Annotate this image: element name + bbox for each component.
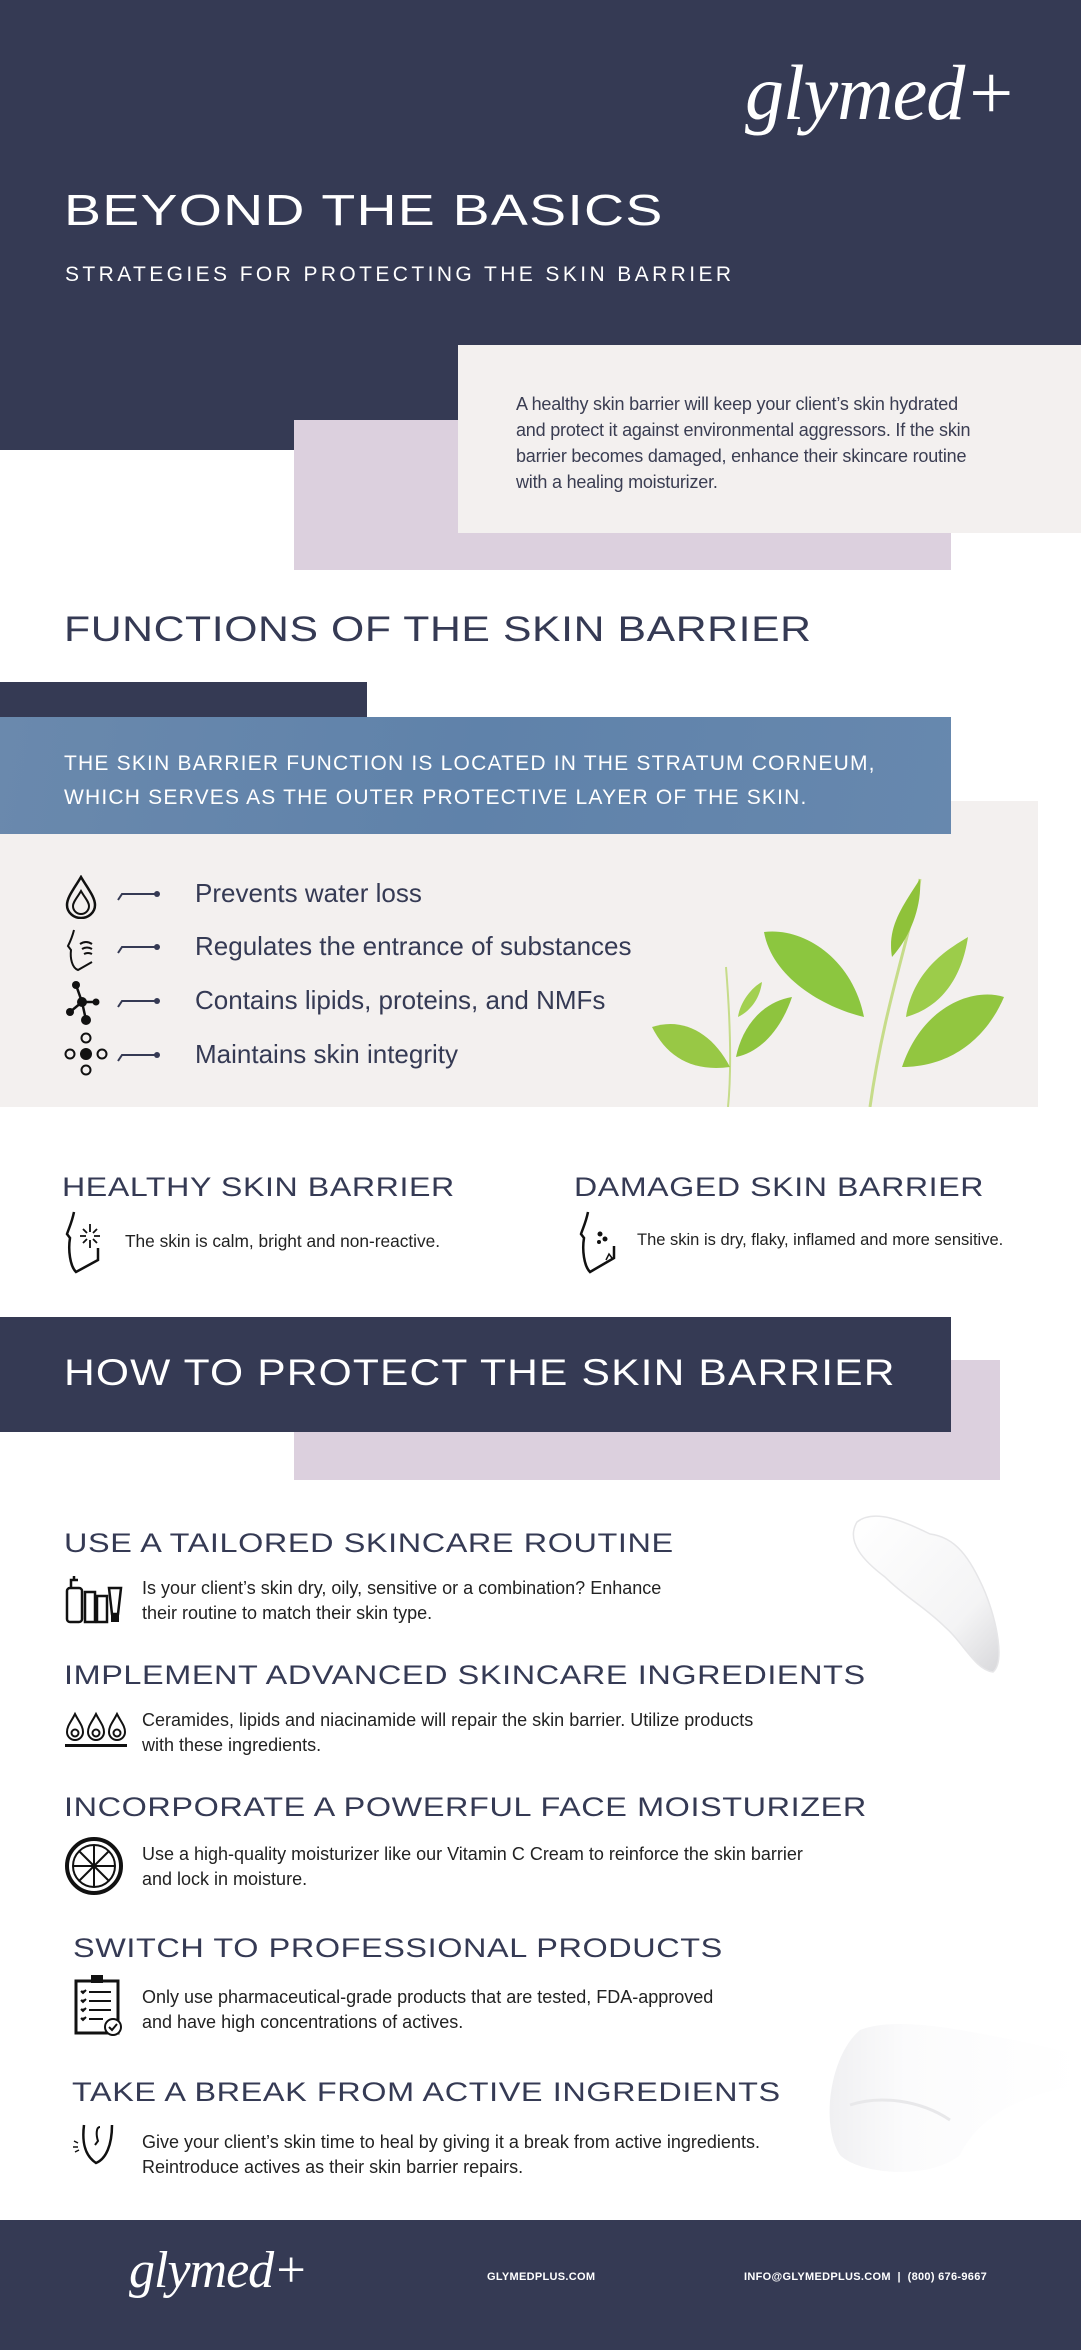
damaged text with icon: The skin is dry, flaky, inflamed and more sensitive. xyxy=(637,1231,1003,1249)
text: and have high concentrations of actives. xyxy=(142,2012,463,2032)
heading: functions: FUNCTIONS OF THE SKIN BARRIER xyxy=(64,610,812,649)
intro text box: barrier becomes damaged, enhance their skincare routine xyxy=(516,446,966,466)
footer website: GLYMEDPLUS.COM xyxy=(487,2271,595,2283)
intro text box: A healthy skin barrier will keep your client’s skin hydrated xyxy=(516,394,958,414)
list item: integrity: Maintains skin integrity xyxy=(195,1039,458,1069)
intro text box: with a healing moisturizer. xyxy=(516,472,718,492)
icon: face xyxy=(66,930,92,972)
text: Only use pharmaceutical-grade products that are tested, FDA-approved xyxy=(142,1987,713,2007)
section: professional products xyxy=(73,1933,723,2036)
damaged text with icon xyxy=(580,1212,1003,1274)
text: with these ingredients. xyxy=(142,1735,321,1755)
section: tailored routine xyxy=(64,1528,674,1624)
section: tailored routine: USE A TAILORED SKINCARE ROUTINE xyxy=(64,1528,674,1558)
navy accent bar xyxy=(0,682,367,718)
illustration: cream swatch bottom xyxy=(830,2026,951,2170)
text: and lock in moisture. xyxy=(142,1869,307,1889)
healthy text with icon: The skin is calm, bright and non-reactive. xyxy=(125,1231,440,1251)
illustration: leaves xyxy=(652,878,1004,1107)
footer logo: glymed+ xyxy=(129,2242,307,2299)
blue band with statement: THE SKIN BARRIER FUNCTION IS LOCATED IN THE STRATUM CORNEUM, xyxy=(64,752,876,775)
list item: substances xyxy=(66,930,632,972)
footer contact: INFO@GLYMEDPLUS.COM | (800) 676-9667 xyxy=(744,2271,987,2283)
icon: bottles xyxy=(66,1576,122,1624)
icon: damaged face xyxy=(580,1212,616,1274)
icon: face break xyxy=(73,2124,114,2164)
list item: lipids xyxy=(66,981,605,1025)
illustration: cream swatch top xyxy=(852,1516,1000,1673)
lavender accent block 2 xyxy=(294,1360,1000,1480)
heading: healthy: HEALTHY SKIN BARRIER xyxy=(62,1172,455,1202)
section: advanced ingredients xyxy=(64,1660,866,1755)
list item: water loss xyxy=(66,875,422,919)
blue band with statement: WHICH SERVES AS THE OUTER PROTECTIVE LAYER OF THE SKIN. xyxy=(64,786,808,809)
subtitle: STRATEGIES FOR PROTECTING THE SKIN BARRIER xyxy=(65,263,734,286)
section: face moisturizer xyxy=(64,1792,867,1895)
healthy text with icon xyxy=(66,1212,440,1274)
icon: calm face xyxy=(66,1212,100,1274)
text: Use a high-quality moisturizer like our Vitamin C Cream to reinforce the skin barrier xyxy=(142,1844,803,1864)
list item: lipids: Contains lipids, proteins, and NMFs xyxy=(195,985,605,1015)
icon: drops xyxy=(65,1712,127,1747)
section: break from actives xyxy=(72,2077,781,2177)
navy bar heading: how to protect: HOW TO PROTECT THE SKIN BARRIER xyxy=(64,1352,896,1393)
blue band with statement xyxy=(0,717,951,834)
section: break from actives: TAKE A BREAK FROM ACTIVE INGREDIENTS xyxy=(72,2077,781,2107)
text: Reintroduce actives as their skin barrier repairs. xyxy=(142,2157,523,2177)
icon: citrus slice xyxy=(65,1837,123,1895)
section: professional products: SWITCH TO PROFESSIONAL PRODUCTS xyxy=(73,1933,723,1963)
navy bar heading: how to protect xyxy=(0,1317,951,1432)
lavender accent block xyxy=(294,420,951,570)
icon: molecule xyxy=(66,981,100,1025)
header background xyxy=(0,0,1081,450)
heading: damaged: DAMAGED SKIN BARRIER xyxy=(574,1172,984,1202)
logo: glymed+ xyxy=(745,49,1016,136)
text: their routine to match their skin type. xyxy=(142,1603,432,1623)
icon: drop xyxy=(66,875,96,919)
intro text box: and protect it against environmental aggressors. If the skin xyxy=(516,420,970,440)
title: BEYOND THE BASICS xyxy=(64,186,664,235)
list item: substances: Regulates the entrance of substances xyxy=(195,931,632,961)
intro text box xyxy=(458,345,1081,533)
section: advanced ingredients: IMPLEMENT ADVANCED SKINCARE INGREDIENTS xyxy=(64,1660,866,1690)
icon: cells xyxy=(64,1032,108,1076)
footer xyxy=(0,2220,1081,2350)
icon: clipboard xyxy=(74,1975,122,2036)
section: face moisturizer: INCORPORATE A POWERFUL FACE MOISTURIZER xyxy=(64,1792,867,1822)
text: Is your client’s skin dry, oily, sensitive or a combination? Enhance xyxy=(142,1578,661,1598)
list item: water loss: Prevents water loss xyxy=(195,878,422,908)
text: Ceramides, lipids and niacinamide will repair the skin barrier. Utilize products xyxy=(142,1710,753,1730)
light panel xyxy=(0,801,1038,1107)
list item: integrity xyxy=(64,1032,458,1076)
text: Give your client’s skin time to heal by giving it a break from active ingredients. xyxy=(142,2132,760,2152)
